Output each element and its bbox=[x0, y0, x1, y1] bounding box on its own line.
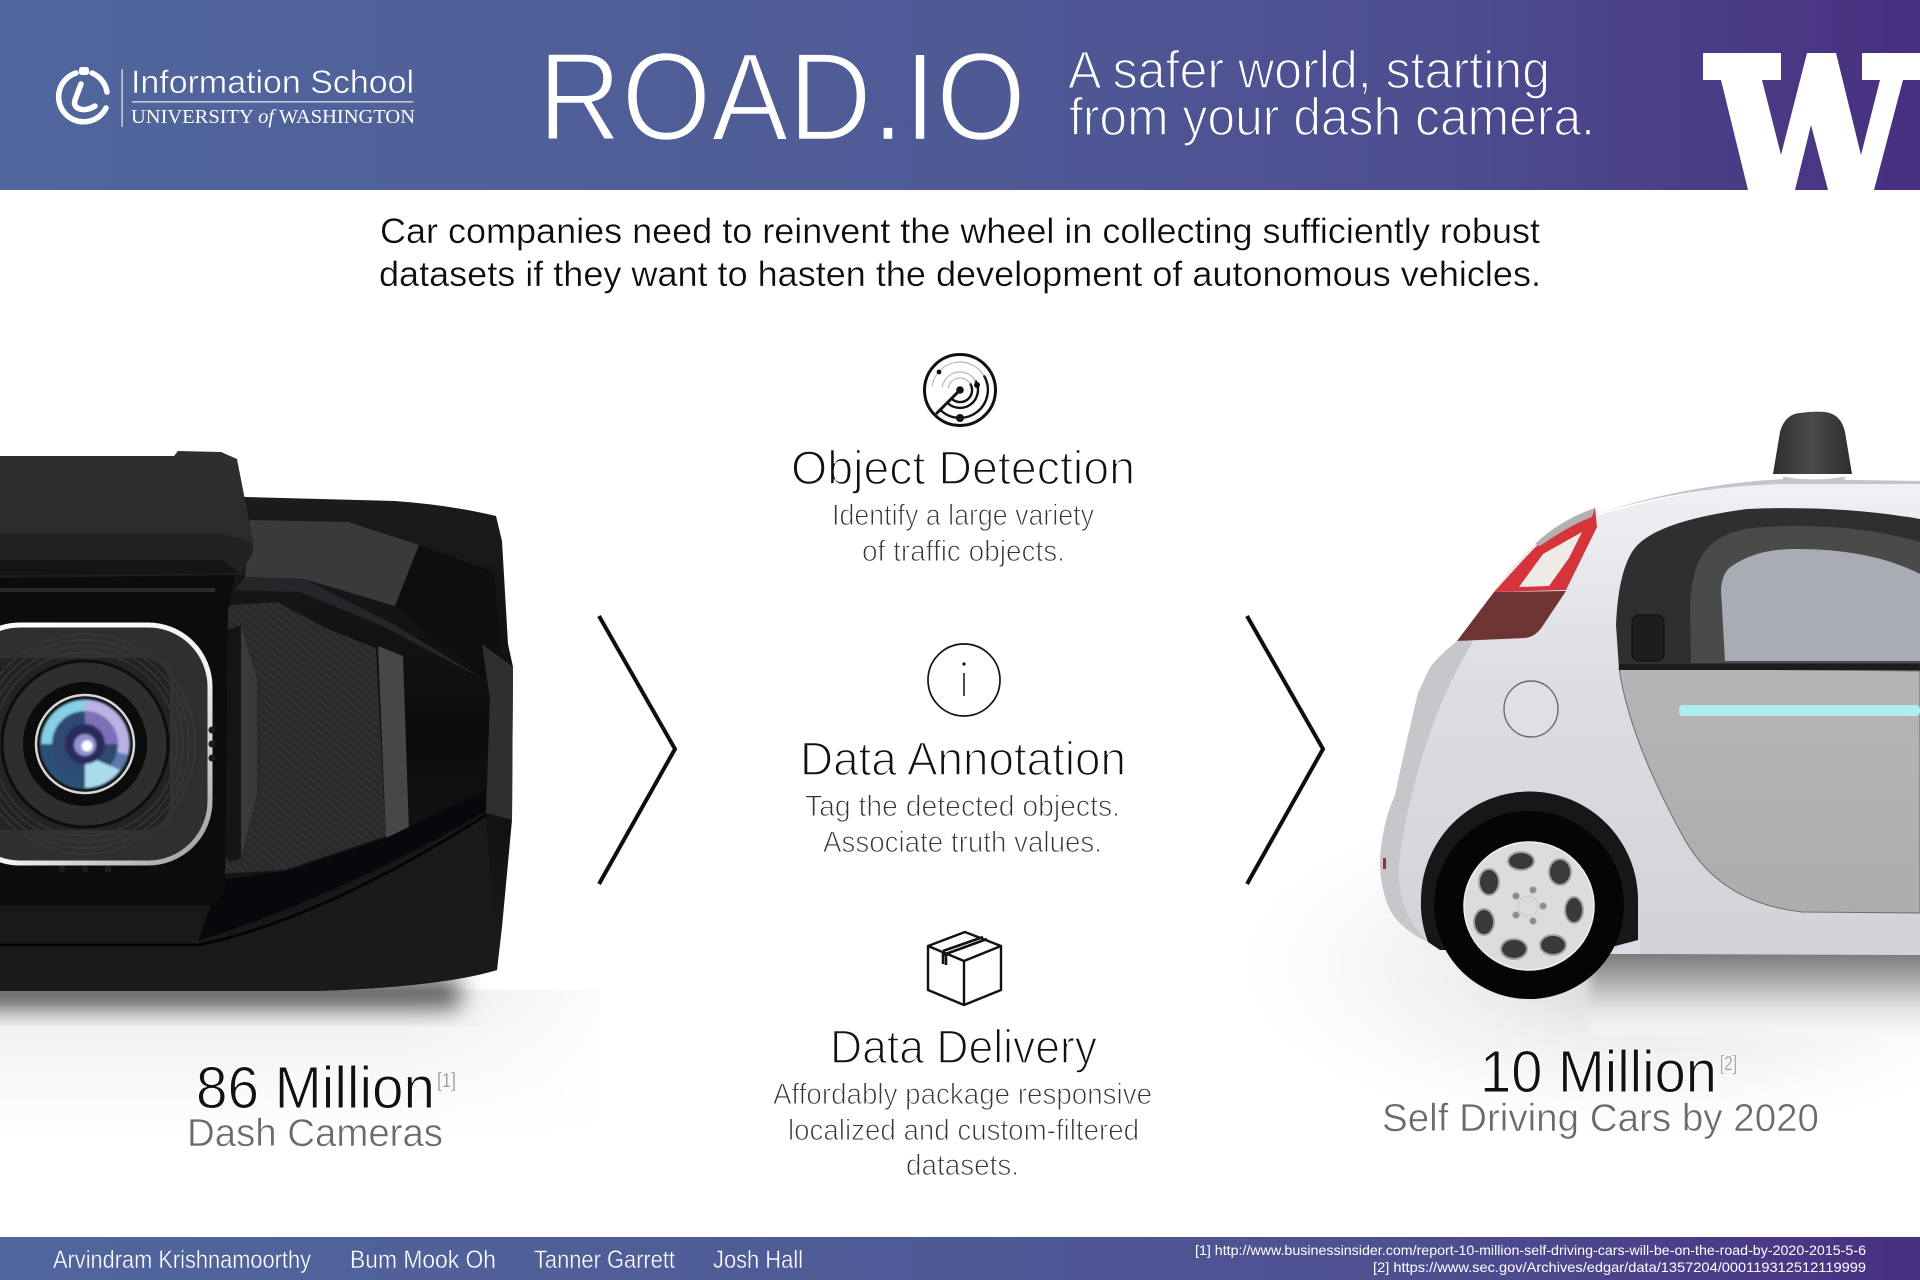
door panel bbox=[1619, 668, 1920, 913]
icon: UW block W bbox=[1703, 53, 1920, 190]
upper gloss panel bbox=[245, 520, 419, 606]
panel: data delivery: datasets. bbox=[906, 1149, 1019, 1182]
window glass bbox=[1721, 549, 1920, 661]
team names: Tanner Garrett bbox=[534, 1246, 675, 1274]
tagline: from your dash camera. bbox=[1069, 88, 1595, 147]
camera lens bbox=[2, 661, 168, 827]
references: [2] https://www.sec.gov/Archives/edgar/data/1357204/000119312512119999 bbox=[1373, 1259, 1866, 1275]
panel: data annotation: Associate truth values. bbox=[823, 826, 1102, 859]
car ground shadow glow bbox=[1240, 790, 1920, 1140]
chevron arrow 2 bbox=[1247, 616, 1323, 884]
team names: Arvindram Krishnamoorthy bbox=[53, 1246, 311, 1274]
stat: 10 Million self driving cars: [2] bbox=[1720, 1053, 1737, 1075]
lower gloss sweep bbox=[0, 813, 497, 991]
stat: 86 Million dash cameras bbox=[187, 1055, 456, 1155]
stat: 10 Million self driving cars bbox=[1382, 1039, 1819, 1140]
stat: 10 Million self driving cars: 10 Million bbox=[1480, 1039, 1717, 1105]
tail light bbox=[1457, 508, 1597, 641]
stat: 86 Million dash cameras: 86 Million bbox=[196, 1055, 435, 1121]
header banner bbox=[0, 0, 1920, 190]
rear bumper bbox=[1380, 640, 1473, 942]
image: self driving car bbox=[1240, 412, 1920, 1140]
camera mount bbox=[0, 451, 253, 578]
tagline bbox=[1068, 41, 1595, 147]
roof sensor dome bbox=[1773, 412, 1852, 474]
intro statement: Car companies need to reinvent the wheel in collecting sufficiently robust bbox=[380, 212, 1540, 251]
panel: object detection: Object Detection bbox=[791, 441, 1135, 494]
lens housing bbox=[0, 575, 235, 905]
references: [1] http://www.businessinsider.com/report-10-million-self-driving-cars-will-be-on-the-road-by-2020-2015-5-6 bbox=[1195, 1242, 1866, 1258]
panel: object detection: of traffic objects. bbox=[862, 535, 1065, 568]
panel: data delivery bbox=[773, 932, 1152, 1182]
intro statement: datasets if they want to hasten the development of autonomous vehicles. bbox=[379, 255, 1541, 294]
chevron arrow 1 bbox=[599, 616, 675, 884]
panel: data annotation: Data Annotation bbox=[800, 732, 1126, 785]
icon: info circle bbox=[928, 644, 1000, 716]
panel: data annotation: Tag the detected objects. bbox=[805, 790, 1120, 823]
panel: object detection bbox=[791, 354, 1135, 568]
panel: object detection: Identify a large variety bbox=[832, 499, 1094, 532]
wheel arch bbox=[1421, 791, 1638, 950]
tagline: A safer world, starting bbox=[1068, 41, 1550, 100]
camera body bbox=[0, 480, 513, 991]
team names bbox=[53, 1246, 803, 1274]
fuel cap bbox=[1504, 681, 1558, 737]
team names: Bum Mook Oh bbox=[350, 1246, 496, 1274]
title: ROAD.IO: ROAD.IO bbox=[538, 28, 1026, 167]
door handle bbox=[1632, 615, 1664, 661]
cyan light strip bbox=[1679, 705, 1920, 716]
icon: radar bbox=[924, 354, 996, 426]
window surround bbox=[1616, 508, 1920, 671]
icon: package box bbox=[928, 932, 1001, 1005]
intro statement bbox=[379, 212, 1541, 294]
logo: Information School: UNIVERSITY of WASHINGTON bbox=[131, 106, 415, 128]
logo: Information School: Information School bbox=[131, 64, 414, 100]
stat: 86 Million dash cameras: [1] bbox=[437, 1070, 456, 1092]
stat: 10 Million self driving cars: Self Driving Cars by 2020 bbox=[1382, 1097, 1819, 1140]
panel: data delivery: localized and custom-filtered bbox=[788, 1114, 1139, 1147]
footer bar bbox=[0, 1237, 1920, 1280]
logo: Information School bbox=[59, 64, 415, 128]
team names: Josh Hall bbox=[713, 1246, 803, 1274]
panel: data delivery: Data Delivery bbox=[830, 1020, 1097, 1073]
image: dash camera bbox=[0, 451, 600, 1140]
rear wheel bbox=[1434, 811, 1624, 999]
car body bbox=[1398, 481, 1920, 955]
white lens bezel bbox=[0, 625, 210, 863]
panel: data annotation bbox=[800, 644, 1126, 859]
textured grille bbox=[217, 602, 386, 874]
references bbox=[1195, 1242, 1866, 1275]
panel: data delivery: Affordably package responsive bbox=[773, 1078, 1152, 1111]
camera floor shadow bbox=[0, 978, 600, 1140]
stat: 86 Million dash cameras: Dash Cameras bbox=[187, 1112, 443, 1155]
